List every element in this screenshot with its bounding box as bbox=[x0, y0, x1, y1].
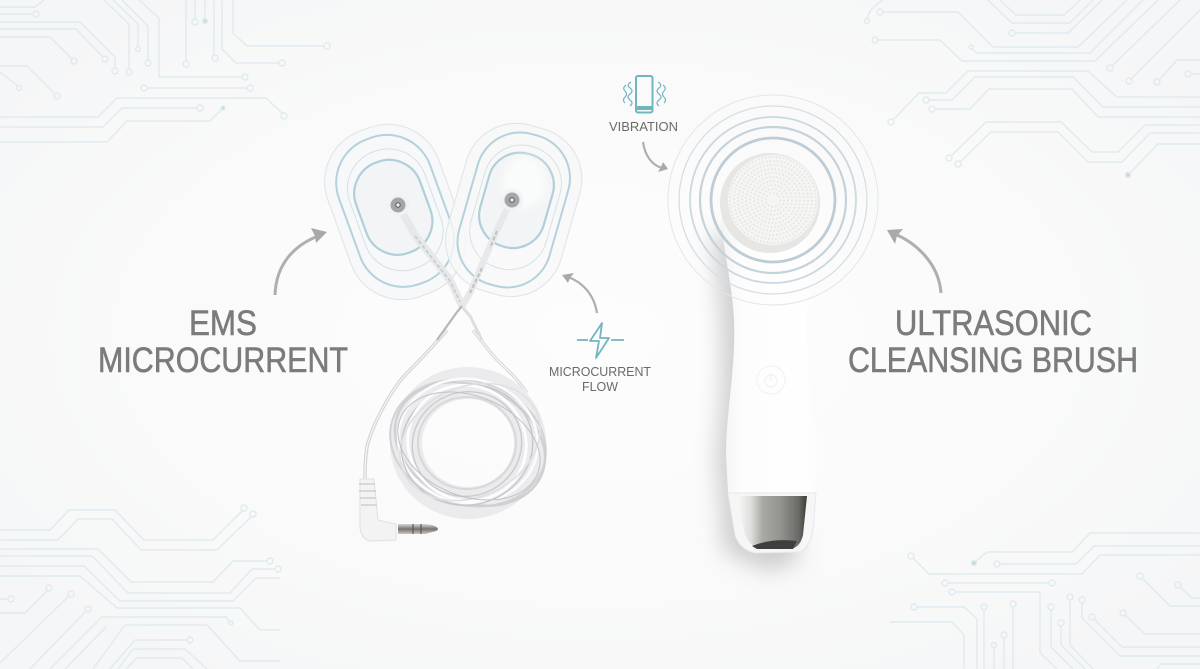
circuit pattern: top right bbox=[864, 0, 1200, 178]
heading: EMS microcurrent bbox=[98, 304, 348, 380]
cleansing brush shadow bbox=[712, 235, 800, 572]
electrode pad: right bbox=[433, 111, 594, 309]
label: microcurrent flow: MICROCURRENT bbox=[549, 364, 651, 379]
brush head bbox=[720, 153, 820, 253]
circuit pattern: top left bbox=[0, 0, 330, 142]
cleansing brush body bbox=[722, 215, 822, 553]
label: vibration: VIBRATION bbox=[609, 119, 678, 134]
arrow: EMS microcurrent bbox=[275, 228, 327, 295]
heading: EMS microcurrent: EMS bbox=[189, 304, 257, 343]
label: microcurrent flow bbox=[549, 364, 651, 394]
circuit pattern: bottom left bbox=[0, 505, 281, 669]
electrode leads and snaps bbox=[388, 189, 523, 340]
power button bbox=[757, 366, 785, 394]
cable coil bbox=[365, 330, 565, 529]
vibration rings bbox=[668, 95, 878, 305]
arrow: microcurrent flow bbox=[562, 273, 597, 313]
electrode pad: left bbox=[309, 109, 481, 315]
heading: ultrasonic cleansing brush bbox=[848, 304, 1138, 380]
heading: ultrasonic cleansing brush: ULTRASONIC bbox=[895, 304, 1092, 343]
icon: vibrating phone bbox=[624, 76, 666, 112]
audio jack plug bbox=[359, 479, 438, 541]
label: microcurrent flow: FLOW bbox=[582, 379, 619, 394]
heading: ultrasonic cleansing brush: CLEANSING BRUSH bbox=[848, 341, 1138, 380]
circuit pattern: bottom right bbox=[890, 533, 1200, 669]
heading: EMS microcurrent: MICROCURRENT bbox=[98, 341, 348, 380]
arrow: vibration bbox=[643, 142, 668, 172]
arrow: ultrasonic brush bbox=[887, 229, 941, 293]
icon: lightning bolt bbox=[577, 323, 624, 358]
